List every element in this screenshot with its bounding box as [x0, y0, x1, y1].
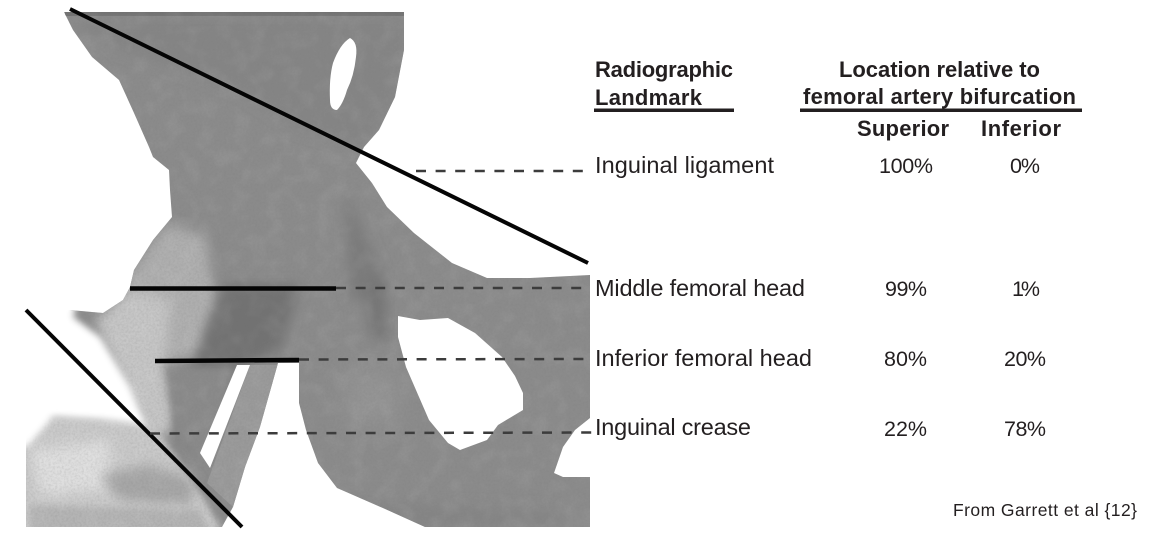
heading: radiographic landmark: Radiographic — [595, 57, 733, 82]
row: middle femoral head: Middle femoral head — [595, 275, 805, 301]
white sliver between femoral neck strips — [200, 365, 250, 468]
obturator foramen — [398, 316, 523, 450]
row: inguinal crease: Inguinal crease — [595, 414, 751, 440]
row: inguinal ligament — [595, 152, 1040, 178]
heading: location relative to femoral artery bifurcation: femoral artery bifurcation — [803, 84, 1076, 109]
row: inferior femoral head — [595, 345, 1046, 371]
row: inguinal crease: 22% — [884, 417, 927, 441]
dashed leader: middle femoral head — [336, 287, 586, 289]
landmark line: inguinal ligament — [70, 9, 588, 263]
dashed leader: inguinal ligament — [416, 170, 592, 172]
row: middle femoral head: 1% — [1012, 277, 1040, 301]
heading: location relative to femoral artery bifurcation — [800, 57, 1082, 112]
dashed leader: inferior femoral head — [299, 358, 586, 361]
row: inferior femoral head: Inferior femoral head — [595, 345, 812, 371]
radiograph of the hip and pelvis — [0, 5, 595, 532]
row: inguinal ligament: 100% — [879, 154, 933, 178]
row: middle femoral head: 99% — [885, 277, 927, 301]
row: inferior femoral head: 20% — [1004, 347, 1046, 371]
row: middle femoral head — [595, 275, 1040, 301]
row: inguinal crease — [595, 414, 1046, 441]
landmark line: middle femoral head — [130, 286, 336, 291]
landmark line: inguinal crease — [26, 310, 242, 527]
row: inguinal ligament: 0% — [1010, 154, 1040, 178]
row: inguinal crease: 78% — [1004, 417, 1046, 441]
dashed leader: inguinal crease — [150, 432, 592, 434]
heading: radiographic landmark: Landmark — [595, 85, 703, 110]
column header: superior: Superior — [857, 116, 949, 141]
source note: From Garrett et al {12} — [953, 500, 1137, 520]
landmark line: inferior femoral head — [155, 360, 299, 361]
heading: radiographic landmark — [594, 57, 734, 112]
column header: inferior: Inferior — [981, 116, 1061, 141]
upper pelvic foramen — [330, 38, 356, 110]
row: inferior femoral head: 80% — [884, 347, 927, 371]
heading: location relative to femoral artery bifurcation: Location relative to — [839, 57, 1040, 82]
row: inguinal ligament: Inguinal ligament — [595, 152, 774, 178]
